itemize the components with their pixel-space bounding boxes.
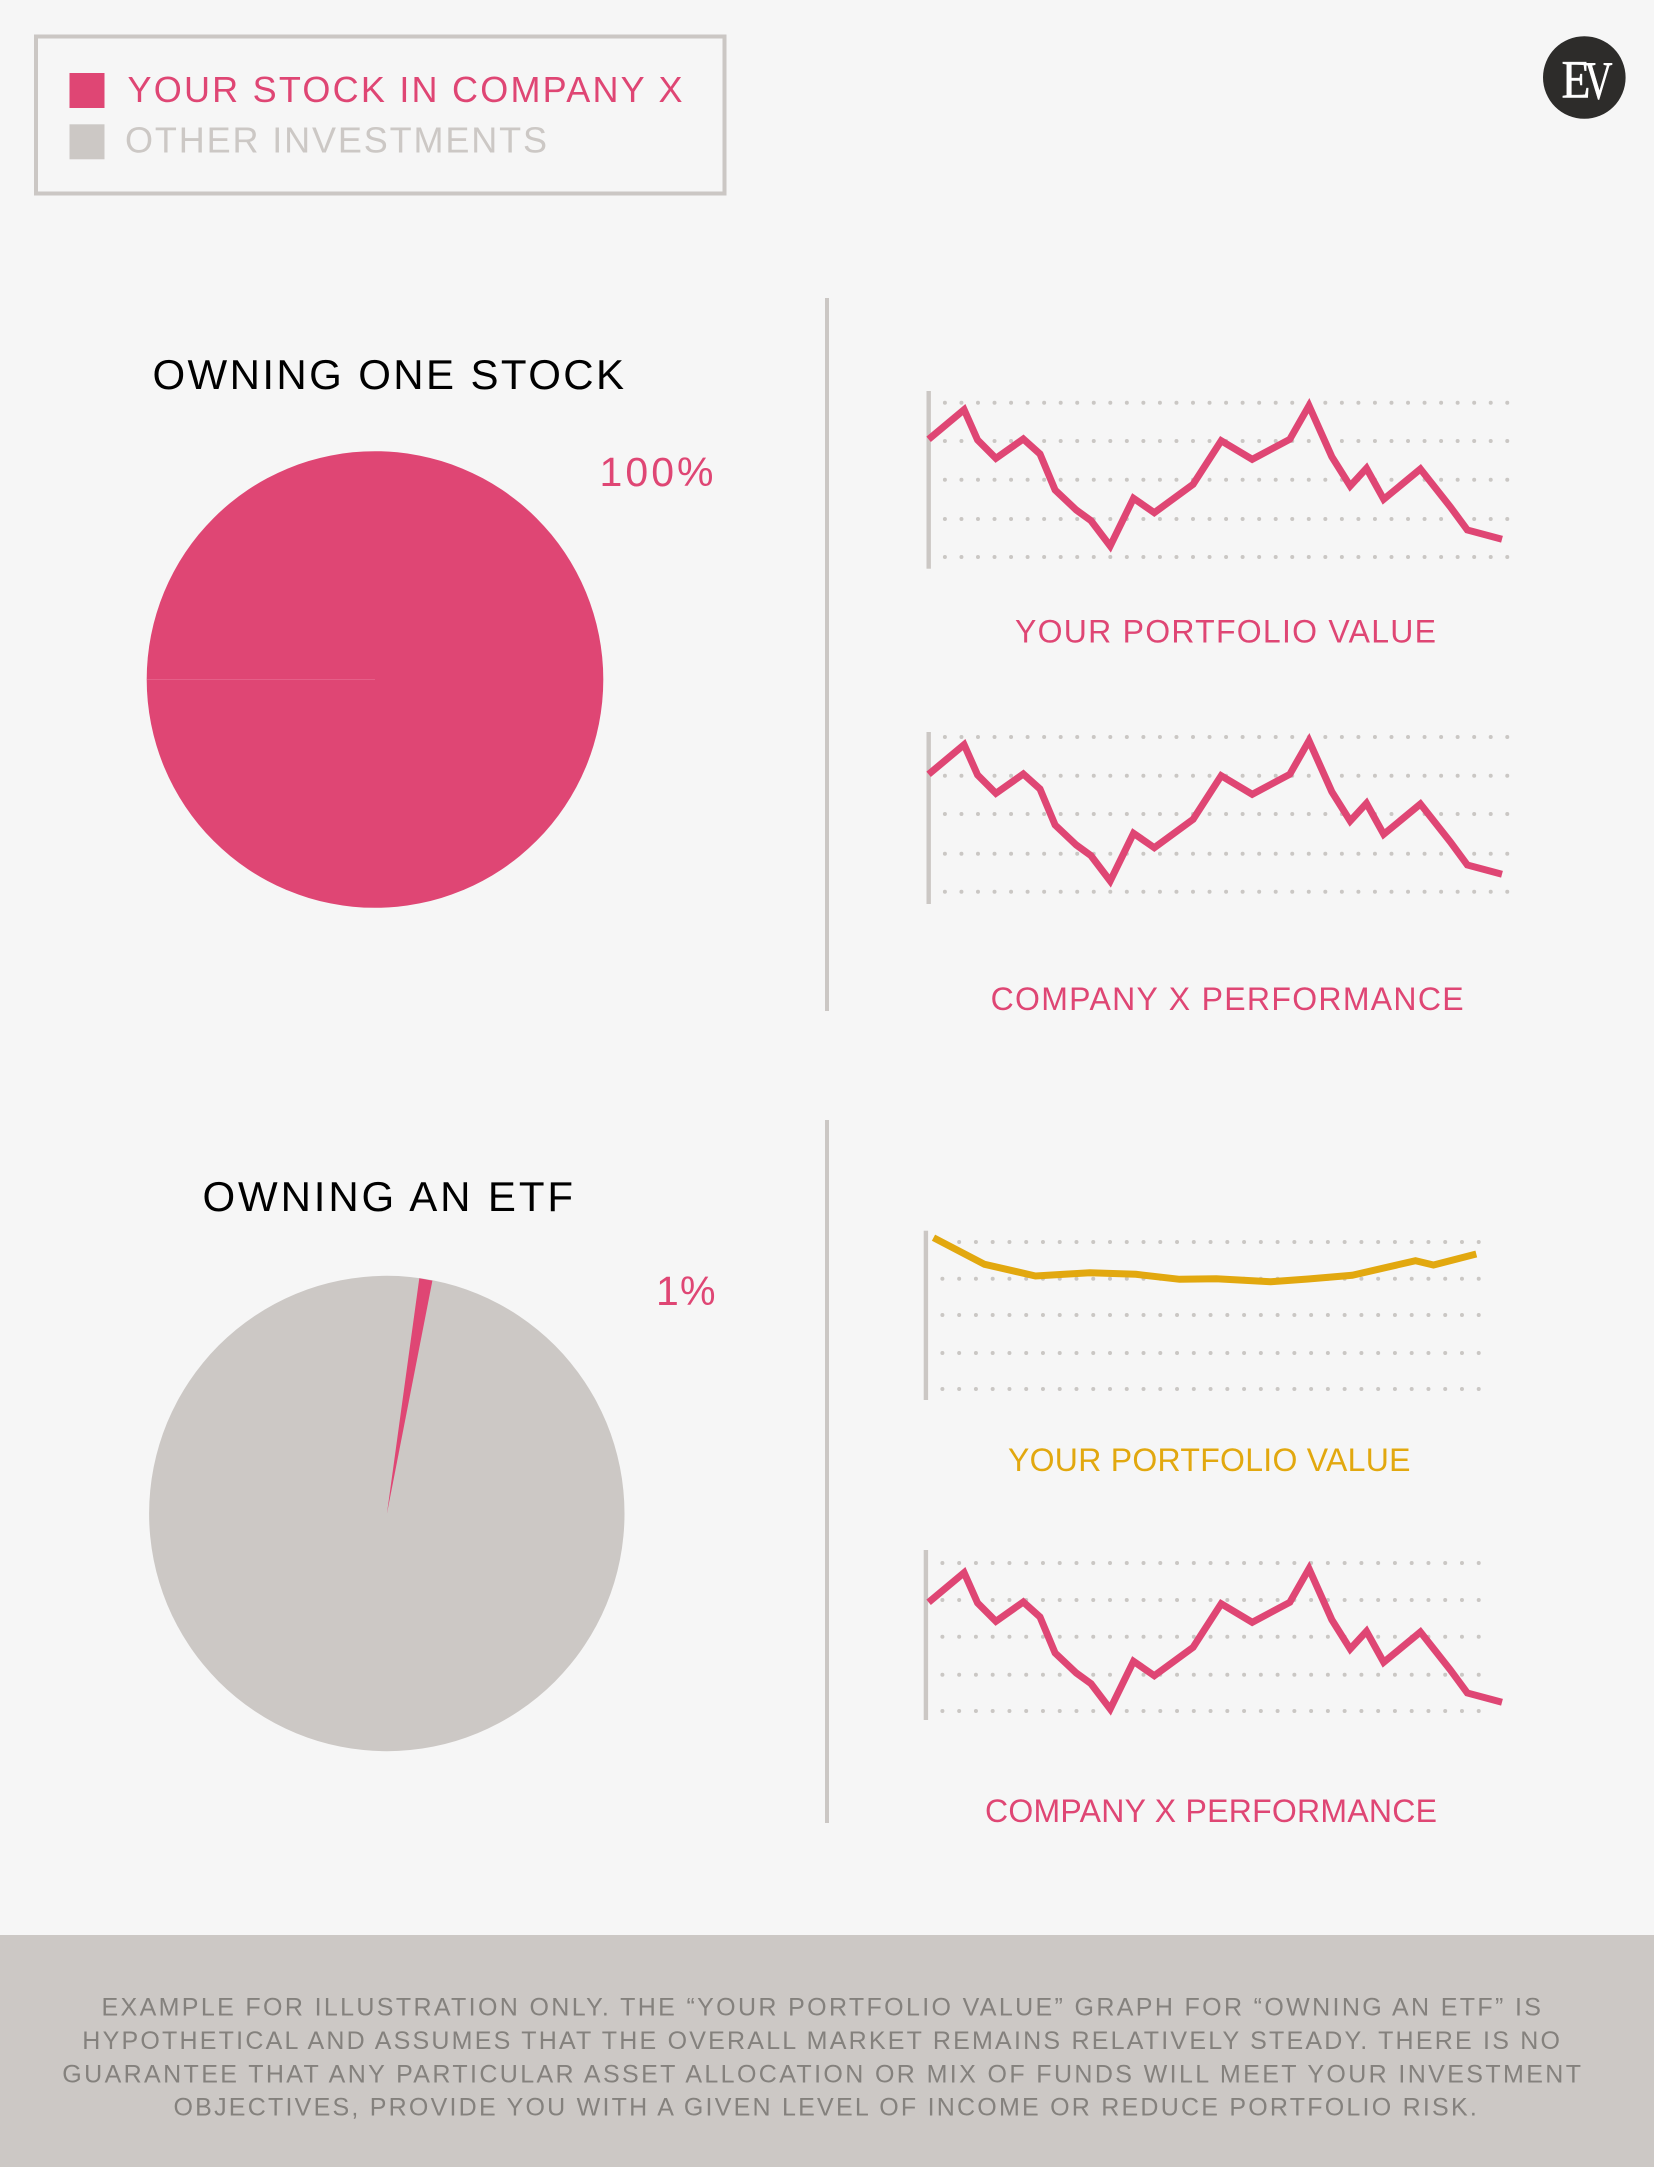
disclaimer text: HYPOTHETICAL AND ASSUMES THAT THE OVERALL MARKET REMAINS RELATIVELY STEADY. THERE IS NO (82, 2027, 1560, 2055)
legend label: other investments: OTHER INVESTMENTS (125, 120, 547, 161)
legend (36, 36, 724, 194)
chart axis (926, 391, 931, 569)
logo: EV badge (1543, 36, 1626, 119)
chart axis (926, 732, 931, 904)
legend frame (36, 36, 724, 194)
disclaimer text (62, 1994, 1581, 2122)
line: portfolio value, one stock (929, 406, 1502, 546)
disclaimer text: EXAMPLE FOR ILLUSTRATION ONLY. THE “YOUR PORTFOLIO VALUE” GRAPH FOR “OWNING AN ETF” IS (102, 1994, 1541, 2022)
disclaimer text: OBJECTIVES, PROVIDE YOU WITH A GIVEN LEVEL OF INCOME OR REDUCE PORTFOLIO RISK. (174, 2094, 1477, 2122)
legend swatch: other investments (70, 124, 104, 159)
chart axis (924, 1550, 928, 1720)
divider: top section (825, 298, 829, 1011)
heading: owning one stock: OWNING ONE STOCK (152, 351, 624, 398)
pie chart: 1% company x (149, 1276, 625, 1751)
pie label: 1%: % (680, 1268, 716, 1314)
logo: EV badge: E (1562, 49, 1590, 109)
pie label: 1%: 1 (656, 1268, 679, 1314)
chart dotted grid (942, 1563, 1480, 1711)
chart dotted grid (945, 403, 1509, 557)
line: company x performance (929, 741, 1502, 881)
disclaimer text: GUARANTEE THAT ANY PARTICULAR ASSET ALLOCATION OR MIX OF FUNDS WILL MEET YOUR INVESTMENT (62, 2060, 1581, 2088)
pie label: 1% (656, 1268, 716, 1314)
section: owning one stock (147, 351, 713, 908)
pie chart: 100% company x (147, 451, 603, 908)
section: owning an etf (149, 1173, 716, 1751)
logo: EV badge: V (1584, 50, 1612, 110)
chart group: one stock, company performance (926, 732, 1509, 1017)
pie label: 100%: 100% (600, 449, 714, 495)
divider: bottom section (825, 1120, 829, 1823)
chart group: etf, portfolio value (924, 1231, 1480, 1478)
chart label: your portfolio value: YOUR PORTFOLIO VALUE (1015, 614, 1436, 650)
chart group: one stock, portfolio value (926, 391, 1509, 650)
legend swatch: your stock (70, 73, 104, 108)
footer disclaimer band (0, 1935, 1654, 2167)
chart label: company x performance: COMPANY X PERFORMANCE (985, 1793, 1437, 1829)
chart group: etf, company performance (924, 1550, 1502, 1829)
chart axis (924, 1231, 928, 1400)
legend label: your stock: YOUR STOCK IN COMPANY X (128, 69, 682, 110)
chart dotted grid (942, 1242, 1480, 1389)
heading: owning an etf: OWNING AN ETF (202, 1173, 573, 1220)
chart label: company x performance: COMPANY X PERFORMANCE (991, 981, 1464, 1017)
chart dotted grid (945, 737, 1509, 892)
chart label: your portfolio value: YOUR PORTFOLIO VALUE (1008, 1442, 1410, 1478)
line: company x performance (929, 1569, 1502, 1709)
line: portfolio value, etf (934, 1238, 1476, 1282)
